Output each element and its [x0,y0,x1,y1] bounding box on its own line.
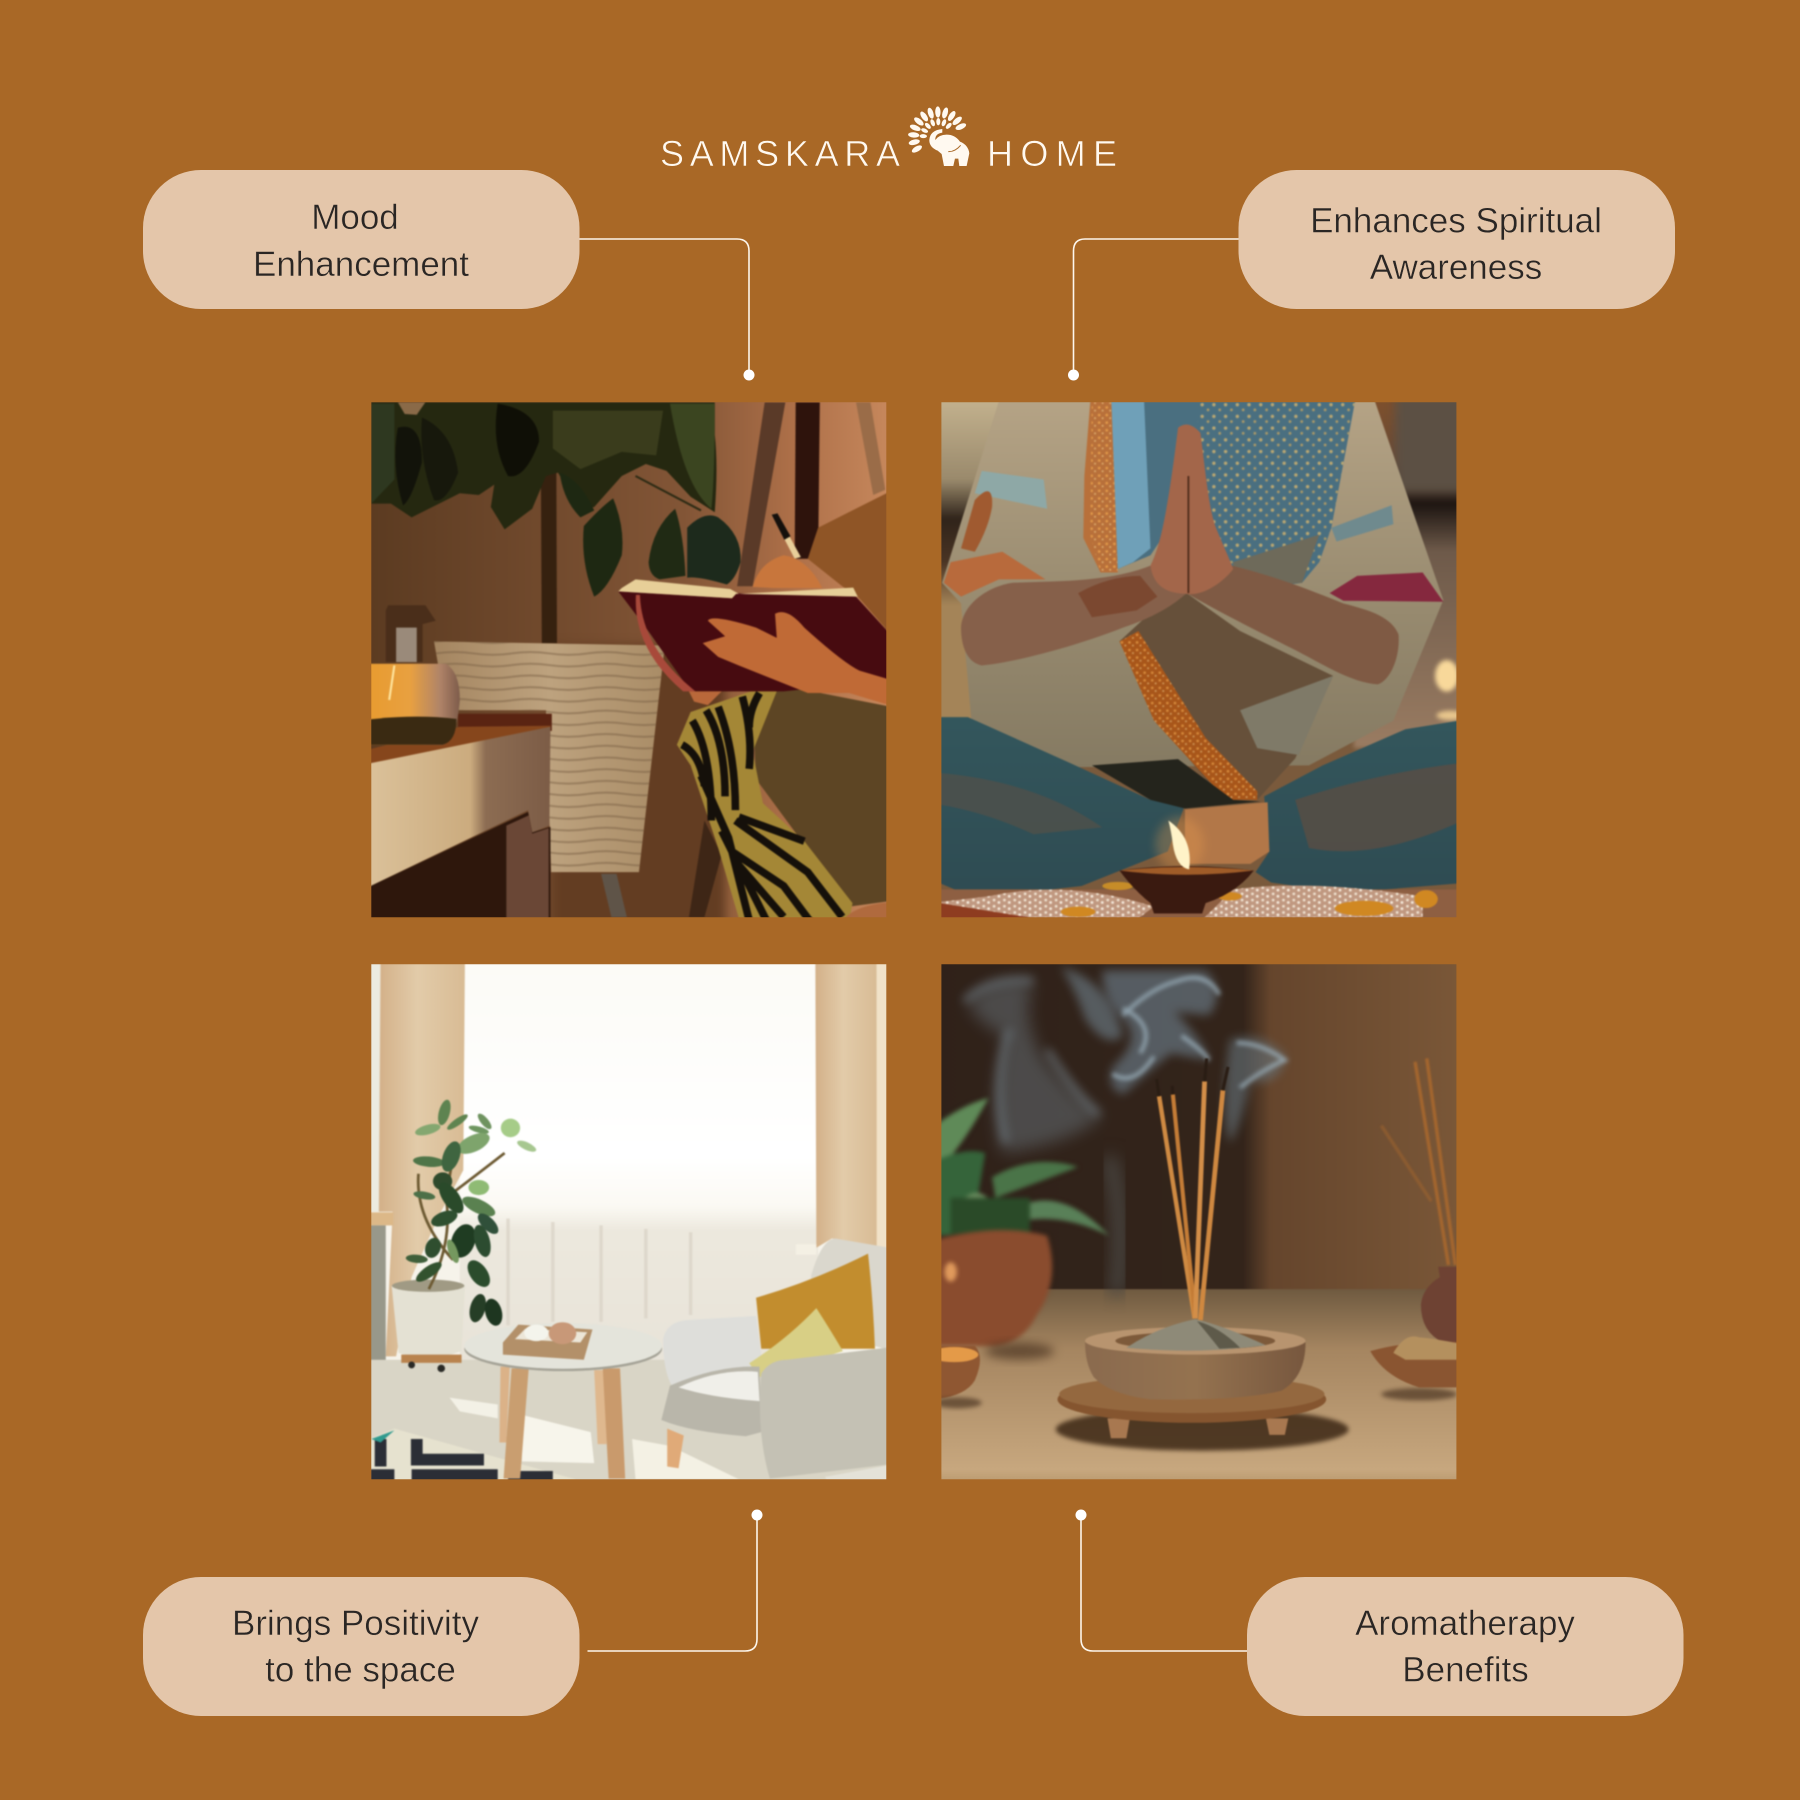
tray with candle and ornament [503,1322,592,1360]
textured tabletop [930,1289,1470,1490]
connector: Enhances Spiritual Awareness [1068,239,1238,380]
white plant pot [392,1280,465,1372]
pill: Aromatherapy Benefits [1247,1577,1684,1716]
table [360,714,552,930]
mustard cushion [756,1254,875,1349]
connector: Mood Enhancement [580,239,754,380]
right sleeve band [1330,505,1443,602]
pill: Mood Enhancement: Mood [311,198,399,237]
left sleeve band [944,471,1047,597]
pill: Enhances Spiritual Awareness [1238,170,1675,309]
logo word: SAMSKARA: SAMSKARA [660,133,900,174]
table shadow under holder [1056,1408,1349,1451]
blurred plant in clay pot [930,1098,1109,1360]
photo: person journaling beside a plant and candle [371,402,886,918]
photo: hands in prayer with diya lamp [941,402,1456,918]
pill: Aromatherapy Benefits: Aromatherapy [1355,1604,1575,1643]
pill: Enhances Spiritual Awareness: Awareness [1370,248,1542,287]
pill: Mood Enhancement: Enhancement [253,245,469,284]
wooden plate [1057,1375,1326,1438]
pale yellow cushion [749,1308,843,1377]
photo: incense sticks with smoke in a clay bowl [941,964,1456,1480]
candle and hourglass [360,605,460,745]
pill: Brings Positivity to the space: Brings Positivity [232,1604,480,1643]
left curtain [360,950,465,1370]
pill: Brings Positivity to the space: to the space [265,1650,456,1690]
hands and pen [689,513,900,930]
background incense and vase right [1370,1058,1470,1400]
sheer shirt [942,390,1443,767]
patterned zebra cloth [677,690,853,930]
pill: Enhances Spiritual Awareness: Enhances Spiritual [1310,202,1602,240]
dark lap [1092,759,1261,808]
orange trim [1083,390,1118,572]
plant foliage and stem [371,402,741,643]
rubber plant [405,1098,538,1328]
knee fabric [753,688,900,907]
connector: Brings Positivity [588,1510,762,1651]
smoke plumes [964,967,1287,1294]
right sleeve [808,486,900,645]
tripod legs [689,402,885,917]
background candle glow [1435,660,1464,720]
pill: Brings Positivity to the space [143,1577,580,1716]
foot [1185,802,1269,864]
floor [360,1360,900,1490]
pill: Aromatherapy Benefits: Benefits [1402,1650,1529,1690]
logo word: HOME: HOME [987,133,1117,174]
logo icon: tree and elephant [908,106,969,166]
round coffee table [464,1323,662,1479]
blue patterned scarf [1111,390,1357,593]
sheer window curtain [460,950,818,1363]
diya lamp with flame [1119,817,1254,914]
small bowl left [930,1346,980,1399]
armchair [661,1239,900,1490]
photo: sunlit living room with plant and armchair [371,964,886,1480]
clay bowl with ash [1085,1319,1306,1400]
right curtain [796,950,900,1255]
floor with rice and marigolds [930,882,1470,930]
teal trousers [930,717,1470,898]
burning incense sticks [1157,1058,1228,1320]
red journal [618,579,900,691]
forearms and praying hands [961,424,1399,684]
logo: Samskara Home [660,106,1117,174]
folded lower scarf [1119,593,1333,800]
connector: Aromatherapy Benefits [1076,1510,1247,1651]
pill: Mood Enhancement [143,170,580,309]
patterned rug [360,1429,580,1490]
planter [434,641,665,917]
